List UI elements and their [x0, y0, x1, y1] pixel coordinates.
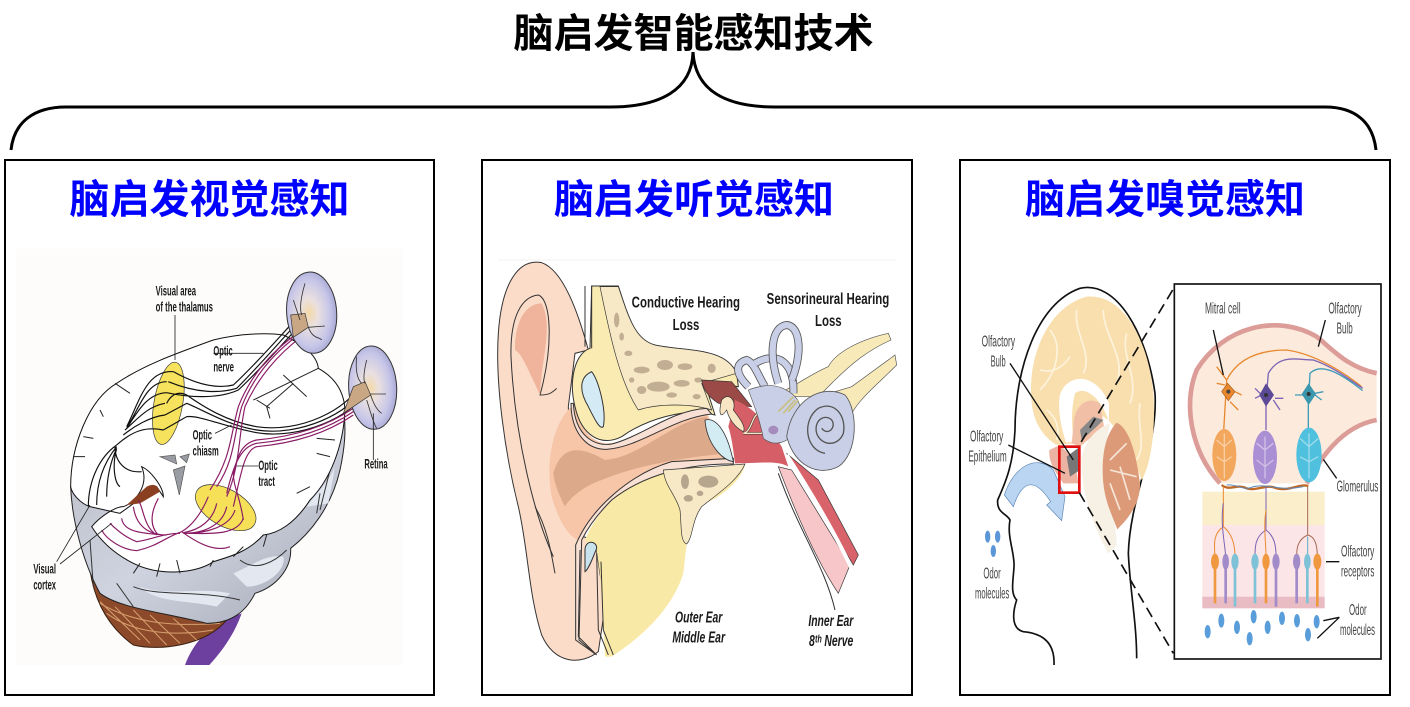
labels: visual pathway: [33, 282, 388, 592]
labels: olfactory system: [968, 300, 1378, 639]
labels: ear anatomy: Loss: [673, 317, 699, 334]
labels: olfactory system: Bulb: [991, 354, 1006, 371]
panel: visual perception: [5, 160, 434, 695]
labels: olfactory system: Mitral cell: [1205, 300, 1241, 317]
labels: olfactory system: Olfactory: [982, 334, 1015, 351]
labels: olfactory system: Odor: [1349, 602, 1367, 619]
labels: ear anatomy: Sensorineural Hearing: [767, 291, 889, 308]
diagram: visual pathway: [16, 248, 403, 665]
labels: olfactory system: Olfactory: [1328, 300, 1362, 317]
panel: auditory perception: [482, 160, 912, 695]
labels: visual pathway: Optic: [258, 457, 278, 473]
labels: ear anatomy: Inner Ear: [808, 613, 854, 630]
labels: visual pathway: Retina: [364, 456, 388, 472]
labels: olfactory system: Epithelium: [968, 449, 1007, 466]
labels: olfactory system: molecules: [1340, 622, 1375, 639]
brace connecting title to panels: [11, 52, 1376, 150]
labels: olfactory system: Bulb: [1337, 320, 1353, 337]
labels: visual pathway: Optic: [213, 342, 233, 358]
labels: visual pathway: of the thalamus: [156, 298, 213, 314]
panel: olfactory perception: [960, 160, 1390, 695]
labels: visual pathway: tract: [258, 473, 275, 489]
labels: ear anatomy: 8ᵗʰ Nerve: [809, 633, 854, 650]
labels: olfactory system: receptors: [1341, 564, 1374, 581]
heading: auditory: 脑启发听觉感知: [554, 178, 834, 222]
labels: olfactory system: Olfactory: [1341, 544, 1374, 561]
labels: ear anatomy: [632, 291, 889, 650]
labels: olfactory system: Odor: [983, 565, 1001, 582]
labels: ear anatomy: Middle Ear: [672, 630, 726, 647]
labels: ear anatomy: Loss: [815, 313, 842, 330]
labels: visual pathway: Visual area: [156, 282, 196, 298]
labels: visual pathway: Optic: [193, 426, 212, 442]
labels: olfactory system: Olfactory: [970, 429, 1003, 446]
heading: visual: 脑启发视觉感知: [70, 178, 350, 222]
labels: visual pathway: Visual: [33, 560, 56, 576]
labels: visual pathway: nerve: [213, 358, 234, 374]
heading: olfactory: 脑启发嗅觉感知: [1025, 178, 1305, 222]
title: 脑启发智能感知技术: [514, 12, 874, 56]
labels: ear anatomy: Conductive Hearing: [632, 294, 740, 311]
labels: visual pathway: cortex: [33, 576, 56, 592]
labels: visual pathway: chiasm: [193, 442, 219, 458]
labels: ear anatomy: Outer Ear: [675, 610, 723, 627]
labels: olfactory system: molecules: [975, 585, 1009, 602]
diagram: olfactory system: [968, 284, 1381, 665]
diagram: ear anatomy: [498, 260, 897, 660]
